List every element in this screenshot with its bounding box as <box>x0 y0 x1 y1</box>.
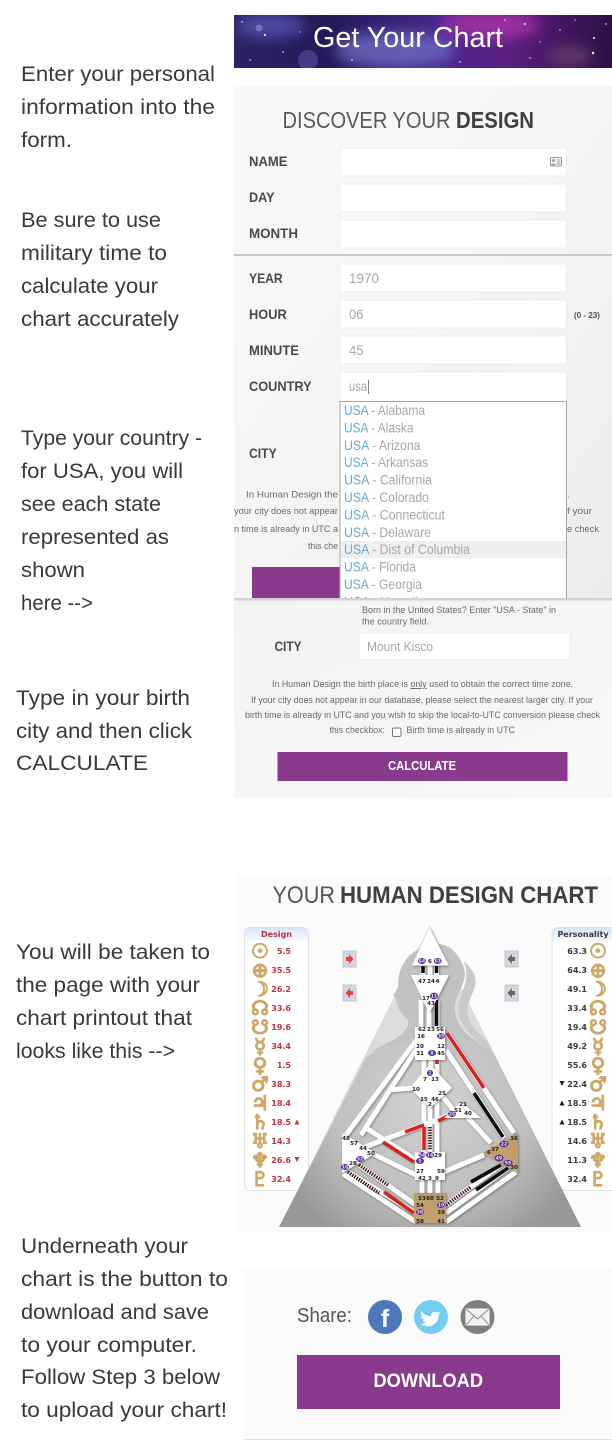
active gate numbers: 34 <box>419 1153 425 1159</box>
text: type your country: here --> <box>21 592 93 615</box>
icon: contact card <box>550 158 562 166</box>
table: design planets <box>244 928 308 1191</box>
silhouette: body triangle <box>279 925 581 1227</box>
gate numbers: 6 <box>487 1150 491 1156</box>
center: solar plexus <box>483 1133 518 1173</box>
personality values <box>567 947 587 1184</box>
personality values: 63.3 <box>567 947 587 956</box>
text: download instructions <box>21 1235 228 1422</box>
design values: 34.4 <box>271 1042 291 1051</box>
icon: email <box>460 1300 494 1334</box>
purple button behind dropdown <box>252 567 340 598</box>
dropdown list <box>340 402 566 609</box>
active gate numbers: 11 <box>431 994 437 1000</box>
personality values: 49.1 <box>567 985 587 994</box>
active gate numbers: 55 <box>505 1161 511 1167</box>
design planet glyphs: ♂ <box>251 1072 269 1096</box>
text: military time <box>21 209 180 331</box>
active gate numbers: 63 <box>434 959 441 965</box>
center: head <box>412 928 449 966</box>
text: type birth city: Type in your birth <box>16 687 190 710</box>
gate numbers: 40 <box>464 1111 472 1117</box>
explanatory text clipped by dropdown: n time is already in UTC a <box>234 524 339 535</box>
field labels: MONTH <box>249 225 298 241</box>
active gate numbers: 22 <box>501 1142 507 1148</box>
personality values: 22.4 <box>567 1080 587 1089</box>
active gate numbers: 26 <box>449 1112 455 1118</box>
gate numbers: 42 <box>418 1176 426 1182</box>
field values: 06 <box>349 306 364 322</box>
field values <box>349 270 379 394</box>
active gate numbers: 38 <box>417 1210 423 1216</box>
gate numbers: 45 <box>437 1051 445 1057</box>
gate numbers: 30 <box>510 1165 518 1171</box>
gate numbers: 43 <box>427 1001 435 1007</box>
panel: human design chart <box>236 875 612 1232</box>
explanatory text clipped by dropdown: this che <box>308 541 338 552</box>
gate numbers: 44 <box>359 1146 367 1152</box>
gate numbers: 47 <box>418 979 426 985</box>
calculate button: CALCULATE <box>388 759 456 773</box>
active gate numbers: 19 <box>438 1203 444 1209</box>
design planet glyphs: ♄ <box>251 1110 269 1134</box>
active gate numbers: 8 <box>430 1051 434 1057</box>
gate numbers: 23 <box>427 1027 435 1033</box>
calculate button <box>278 752 568 781</box>
personality planet glyphs: ♅ <box>589 1129 607 1153</box>
design planet glyphs: ☊ <box>251 996 269 1020</box>
gate numbers: 37 <box>491 1147 499 1153</box>
gate numbers: 3 <box>428 1176 432 1182</box>
design planet glyphs: ☽ <box>251 977 269 1001</box>
design values: 38.3 <box>271 1080 291 1089</box>
field labels: NAME <box>249 153 288 169</box>
text: military time: calculate your <box>21 275 158 298</box>
download button: DOWNLOAD <box>374 1371 483 1392</box>
gate numbers <box>342 959 518 1225</box>
design values: 1.5 <box>277 1061 291 1070</box>
gate numbers: 58 <box>416 1219 424 1225</box>
personality header: Personality <box>557 930 609 939</box>
gate numbers: 29 <box>434 1153 442 1159</box>
center: spleen <box>342 1133 376 1173</box>
active gate numbers <box>342 959 511 1216</box>
banner title: Get Your Chart <box>313 22 503 54</box>
gate numbers: 2 <box>428 1102 432 1108</box>
design planet glyphs: ♆ <box>251 1148 269 1172</box>
field labels: HOUR <box>249 306 287 322</box>
text: type your country <box>21 427 202 615</box>
country hint <box>362 605 556 628</box>
banner: get your chart <box>234 15 612 68</box>
text: military time: military time to <box>21 242 167 265</box>
design values: 32.4 <box>271 1175 291 1184</box>
text: enter your information: form. <box>21 129 72 152</box>
center: g <box>410 1064 452 1108</box>
text: military time: Be sure to use <box>21 209 161 232</box>
personality planet glyphs: ☉ <box>589 939 607 963</box>
gate numbers: 12 <box>437 1044 445 1050</box>
dropdown list: USA - Hawaii <box>344 593 418 609</box>
gate numbers: 62 <box>418 1027 426 1033</box>
text: enter your information: information into the <box>21 96 215 119</box>
design values: 26.2 <box>271 985 291 994</box>
gate numbers: 53 <box>418 1196 426 1202</box>
form heading: DESIGN <box>456 107 534 133</box>
center: throat <box>415 1027 445 1060</box>
icon: twitter <box>414 1300 448 1334</box>
gate numbers: 54 <box>416 1203 424 1209</box>
gate numbers: 51 <box>454 1108 462 1114</box>
design values: 18.4 <box>271 1099 291 1108</box>
text: chart printout <box>16 941 210 1063</box>
text: download instructions: Underneath your <box>21 1235 188 1258</box>
icon: design arrows <box>343 951 356 1001</box>
gate numbers: 16 <box>417 1034 425 1040</box>
dropdown list: USA - Delaware <box>344 524 431 540</box>
personality planet glyphs: ⊕ <box>590 958 606 982</box>
explanatory text clipped by dropdown: f your <box>567 506 592 517</box>
active gate numbers: 64 <box>419 959 425 965</box>
gate numbers: 48 <box>342 1136 350 1142</box>
dropdown list: USA - Colorado <box>344 489 429 505</box>
field labels: YEAR <box>249 270 283 286</box>
gate numbers: 6 <box>428 959 432 965</box>
gate numbers: 27 <box>416 1169 424 1175</box>
personality planet glyphs: ♆ <box>589 1148 607 1172</box>
country hint: Born in the United States? Enter "USA - State" in <box>362 605 556 616</box>
text: chart printout: looks like this --> <box>16 1040 175 1063</box>
personality change markers <box>560 1081 564 1124</box>
personality values: 64.3 <box>567 966 587 975</box>
design planet glyphs: ☋ <box>251 1015 269 1039</box>
chart heading: HUMAN DESIGN CHART <box>340 882 598 909</box>
personality planet glyphs: ☽ <box>589 977 607 1001</box>
hour range hint: (0 - 23) <box>574 311 600 320</box>
gate numbers: 7 <box>423 1077 427 1083</box>
panel: share and download <box>243 1268 612 1440</box>
activated gates <box>423 966 436 1026</box>
explanatory text clipped by dropdown: e check <box>567 524 599 535</box>
dropdown list: USA - Alaska <box>344 419 414 435</box>
field values: 45 <box>349 342 364 358</box>
explanatory text clipped by dropdown <box>234 490 599 552</box>
design planet glyphs: ♅ <box>251 1129 269 1153</box>
input fields <box>340 148 566 402</box>
dropdown list: USA - California <box>344 472 432 488</box>
design planet glyphs <box>251 939 269 1191</box>
personality values: 55.6 <box>567 1061 587 1070</box>
text: download instructions: to upload your chart! <box>21 1399 227 1422</box>
dropdown list: USA - Connecticut <box>344 506 445 522</box>
center: ajna <box>411 975 449 1012</box>
design values: 26.6 <box>271 1156 291 1165</box>
personality values: 32.4 <box>567 1175 587 1184</box>
icon: facebook: f <box>381 1305 390 1333</box>
gate numbers: 13 <box>431 1077 439 1083</box>
text: chart printout: chart printout that <box>16 1007 192 1030</box>
center: root <box>414 1193 446 1223</box>
active gate numbers: 35 <box>438 1034 444 1040</box>
gate numbers: 20 <box>416 1044 424 1050</box>
personality planet glyphs: ♀ <box>591 1053 605 1077</box>
explanatory text clipped by dropdown: In Human Design the <box>246 490 338 500</box>
checkbox <box>392 728 401 736</box>
gate numbers: 17 <box>422 996 430 1002</box>
personality values: 18.5 <box>567 1118 587 1127</box>
personality planet glyphs: ♇ <box>589 1167 607 1191</box>
time zone explanation: In Human Design the birth place is only used to obtain the correct time zone. <box>272 679 573 690</box>
text: download instructions: chart is the button to <box>21 1268 228 1291</box>
design change markers <box>294 1120 300 1162</box>
design values: 5.5 <box>277 947 291 956</box>
text: chart printout: You will be taken to <box>16 941 210 964</box>
design planet glyphs: ♀ <box>253 1053 267 1077</box>
text: enter your information <box>21 63 215 152</box>
active gate numbers: 1 <box>428 1071 432 1077</box>
gate numbers: 39 <box>437 1210 445 1216</box>
text: type your country: shown <box>21 559 85 582</box>
gate numbers: 46 <box>431 1097 439 1103</box>
text: type birth city <box>16 687 193 775</box>
gate numbers: 36 <box>510 1136 518 1142</box>
text: type your country: represented as <box>21 526 169 549</box>
dropdown list: USA - Arizona <box>344 437 421 453</box>
table: personality planets <box>552 928 612 1191</box>
personality planet glyphs: ♃ <box>589 1091 607 1115</box>
design values: 18.5 <box>271 1118 291 1127</box>
city label: CITY <box>274 638 302 654</box>
personality planet glyphs: ♄ <box>589 1110 607 1134</box>
active gate numbers: 32 <box>357 1157 363 1163</box>
design values: 35.5 <box>271 966 291 975</box>
gate numbers: 57 <box>350 1141 358 1147</box>
text: download instructions: Follow Step 3 below <box>21 1366 221 1389</box>
personality planet glyphs: ☋ <box>589 1015 607 1039</box>
center: sacral <box>415 1152 445 1180</box>
design planet glyphs: ⊕ <box>252 958 268 982</box>
gate numbers: 28 <box>349 1161 357 1167</box>
text: download instructions: download and save <box>21 1301 209 1324</box>
personality values: 18.5 <box>567 1099 587 1108</box>
gate numbers: 52 <box>436 1196 444 1202</box>
gate numbers: 41 <box>437 1219 445 1225</box>
share label: Share: <box>297 1305 352 1327</box>
field values: 1970 <box>349 270 379 286</box>
design planet glyphs: ♃ <box>251 1091 269 1115</box>
download button <box>297 1355 560 1409</box>
text: type your country: for USA, you will <box>21 460 183 483</box>
city value: Mount Kisco <box>367 639 433 654</box>
explanatory text clipped by dropdown: your city does not appear <box>234 506 338 517</box>
personality values: 49.2 <box>567 1042 587 1051</box>
text: enter your information: Enter your personal <box>21 63 215 86</box>
field labels: MINUTE <box>249 342 299 358</box>
gate numbers: 60 <box>426 1196 434 1202</box>
text: type your country: see each state <box>21 493 161 516</box>
personality values: 14.6 <box>567 1137 587 1146</box>
design values: 33.6 <box>271 1004 291 1013</box>
design values: 14.3 <box>271 1137 291 1146</box>
form heading: DISCOVER YOUR <box>282 107 450 133</box>
center: ego <box>444 1102 481 1118</box>
dropdown list: USA - Arkansas <box>344 454 428 470</box>
gate numbers: 56 <box>436 1027 444 1033</box>
field labels <box>249 153 312 461</box>
dropdown list: USA - Georgia <box>344 576 422 592</box>
dropdown list: USA - Alabama <box>344 402 425 418</box>
text: download instructions: to your computer. <box>21 1334 197 1357</box>
gate numbers: 25 <box>438 1091 446 1097</box>
icon: personality arrows <box>505 951 518 1001</box>
chart heading: YOUR <box>272 882 335 909</box>
active gate numbers: 49 <box>496 1156 502 1162</box>
active gate numbers: 14 <box>427 1153 433 1159</box>
channels <box>343 963 516 1222</box>
gate numbers: 21 <box>459 1102 467 1108</box>
divider between screenshots <box>234 254 612 256</box>
design planet glyphs: ☿ <box>254 1034 266 1058</box>
design values <box>271 947 291 1184</box>
bodygraph <box>341 928 518 1225</box>
text: type your country: Type your country - <box>21 427 202 450</box>
panel: city and calculate <box>234 598 612 798</box>
personality values: 33.4 <box>567 1004 587 1013</box>
personality values: 11.3 <box>567 1156 587 1165</box>
field values: usa <box>349 378 367 394</box>
dropdown list: USA - Dist of Columbia <box>344 541 470 557</box>
personality planet glyphs: ☿ <box>592 1034 604 1058</box>
text: type birth city: city and then click <box>16 720 193 743</box>
design values: 19.6 <box>271 1023 291 1032</box>
panel: birth data form <box>234 86 612 609</box>
time zone explanation: If your city does not appear in our database, please select the nearest larger city. If your <box>251 695 593 706</box>
country hint: the country field. <box>362 616 429 628</box>
icon: facebook <box>368 1300 402 1334</box>
gate numbers: 59 <box>437 1169 445 1175</box>
personality planet glyphs <box>589 939 607 1191</box>
time zone explanation <box>245 679 600 736</box>
field labels: COUNTRY <box>249 378 312 394</box>
explanatory text clipped by dropdown: . <box>567 490 570 500</box>
field labels: DAY <box>249 189 275 205</box>
gate numbers: 9 <box>435 1176 439 1182</box>
text: chart printout: the page with your <box>16 974 200 997</box>
design planet glyphs: ♇ <box>251 1167 269 1191</box>
active gate numbers: 5 <box>418 1159 422 1165</box>
design planet glyphs: ☉ <box>251 939 269 963</box>
personality planet glyphs: ☊ <box>589 996 607 1020</box>
gate numbers: 31 <box>416 1051 424 1057</box>
personality values: 19.4 <box>567 1023 587 1032</box>
gate numbers: 10 <box>412 1087 420 1093</box>
text: type birth city: CALCULATE <box>16 752 148 775</box>
gate numbers: 24 <box>427 979 435 985</box>
personality planet glyphs: ♂ <box>589 1072 607 1096</box>
city input <box>359 633 570 660</box>
time zone explanation: this checkbox: <box>330 725 385 736</box>
active gate numbers: 18 <box>342 1165 348 1171</box>
dropdown list: USA - Florida <box>344 559 416 575</box>
active gate circles <box>341 958 512 1215</box>
design header: Design <box>261 930 292 939</box>
text: military time: chart accurately <box>21 308 180 331</box>
gate numbers: 4 <box>436 979 440 985</box>
gate numbers: 50 <box>367 1151 375 1157</box>
gate numbers: 15 <box>420 1097 428 1103</box>
field labels: CITY <box>249 445 277 461</box>
time zone explanation: Birth time is already in UTC <box>406 725 515 736</box>
